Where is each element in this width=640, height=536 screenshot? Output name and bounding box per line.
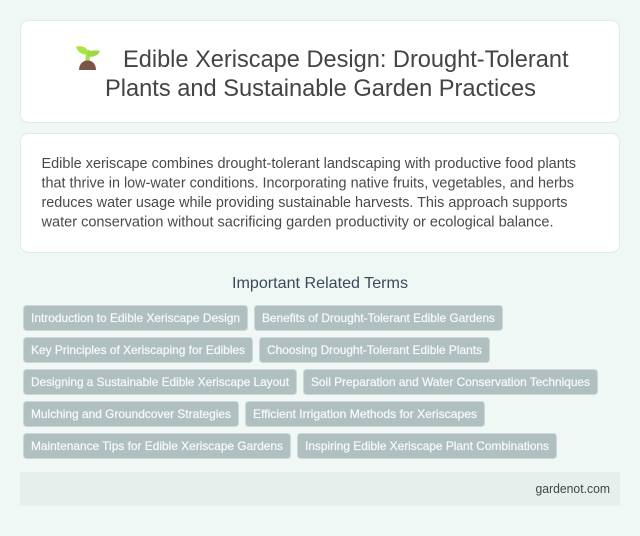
footer source text: gardenot.com (536, 481, 610, 496)
tag: Designing a Sustainable Edible Xeriscape Layout (31, 375, 290, 389)
tag: Maintenance Tips for Edible Xeriscape Gardens (31, 439, 283, 453)
heading: related terms: Important Related Terms (232, 275, 408, 292)
description text (40, 156, 576, 230)
tag (24, 370, 296, 394)
panel: related term tags (24, 306, 598, 458)
tag (260, 338, 490, 362)
description text: that thrive in low-water conditions. Incorporating native fruits, vegetables, and herbs (42, 176, 574, 192)
description text: water conservation without sacrificing garden productivity or ecological balance. (40, 214, 554, 230)
tag (24, 434, 290, 458)
tag (24, 306, 248, 330)
footer bar (20, 472, 620, 506)
tag (246, 402, 484, 426)
tag (298, 434, 556, 458)
tag: Key Principles of Xeriscaping for Edibles (31, 343, 245, 357)
panel: title card (20, 20, 620, 122)
tag (24, 338, 252, 362)
tag (304, 370, 598, 394)
tag: Benefits of Drought-Tolerant Edible Gardens (262, 311, 495, 325)
tag (254, 306, 502, 330)
tag: Efficient Irrigation Methods for Xeriscapes (253, 407, 477, 421)
description text: Edible xeriscape combines drought-tolerant landscaping with productive food plants (42, 156, 576, 172)
title (105, 46, 569, 102)
panel: description card (20, 134, 620, 252)
description text: reduces water usage while providing sustainable harvests. This approach supports (42, 195, 568, 211)
tag: Soil Preparation and Water Conservation Techniques (311, 375, 590, 389)
tag: Choosing Drought-Tolerant Edible Plants (267, 343, 482, 357)
tag: Mulching and Groundcover Strategies (31, 407, 231, 421)
title: Edible Xeriscape Design: Drought-Tolerant (123, 46, 569, 73)
tag: Introduction to Edible Xeriscape Design (31, 311, 240, 325)
tag (24, 402, 238, 426)
tag: Inspiring Edible Xeriscape Plant Combinations (305, 439, 549, 453)
title: Plants and Sustainable Garden Practices (105, 75, 536, 102)
icon: seedling (76, 46, 100, 70)
